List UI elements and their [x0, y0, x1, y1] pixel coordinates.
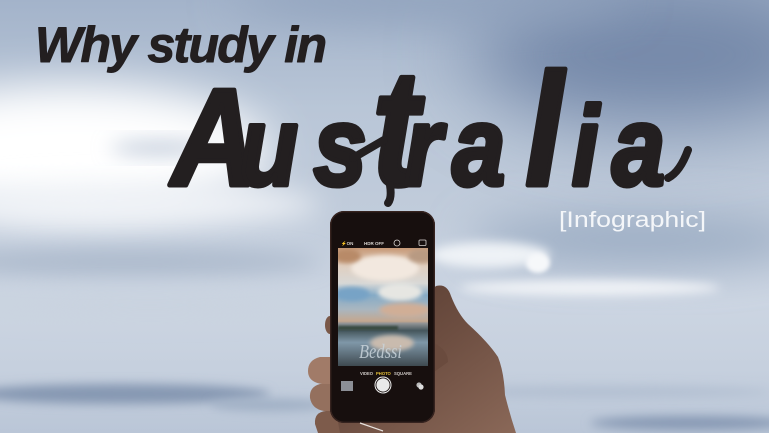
hand: fingers [308, 316, 448, 433]
title: Australia: t [372, 36, 425, 221]
phone: screen photo [338, 248, 428, 366]
phone: last photo thumbnail [341, 381, 353, 391]
swash: brush connectors and tail [353, 140, 688, 203]
hand: palm and thumb [318, 285, 516, 433]
phone body [330, 211, 435, 423]
title: Australia: u [240, 85, 298, 210]
title: Australia: a [612, 85, 665, 210]
subtitle: [Infographic]: [Infographic] [559, 207, 706, 232]
phone: camera mode labels: VIDEO [360, 371, 374, 376]
phone: camera mode labels: PHOTO [376, 371, 392, 376]
phone: top camera controls: ⚡ON [341, 240, 353, 247]
title: Australia: a [452, 85, 505, 210]
phone: shutter button [375, 377, 391, 393]
phone: filters icon [416, 382, 424, 390]
title: Australia [169, 36, 688, 221]
title: Australia: i [572, 85, 600, 210]
phone: top camera controls: HDR OFF [364, 241, 384, 246]
title: Australia: s [314, 85, 367, 210]
title: Australia: l [525, 42, 566, 219]
phone: top camera controls [341, 240, 426, 247]
highlight under phone [360, 423, 383, 431]
title: Australia: A [169, 61, 256, 215]
watermark: Bedssi: Bedssi [359, 341, 402, 363]
title: Why study in: Why study in [35, 17, 327, 73]
title: Australia: r [405, 85, 447, 210]
phone: camera mode labels [360, 371, 412, 376]
hand holding phone [308, 211, 516, 433]
phone: camera mode labels: SQUARE [394, 371, 412, 376]
